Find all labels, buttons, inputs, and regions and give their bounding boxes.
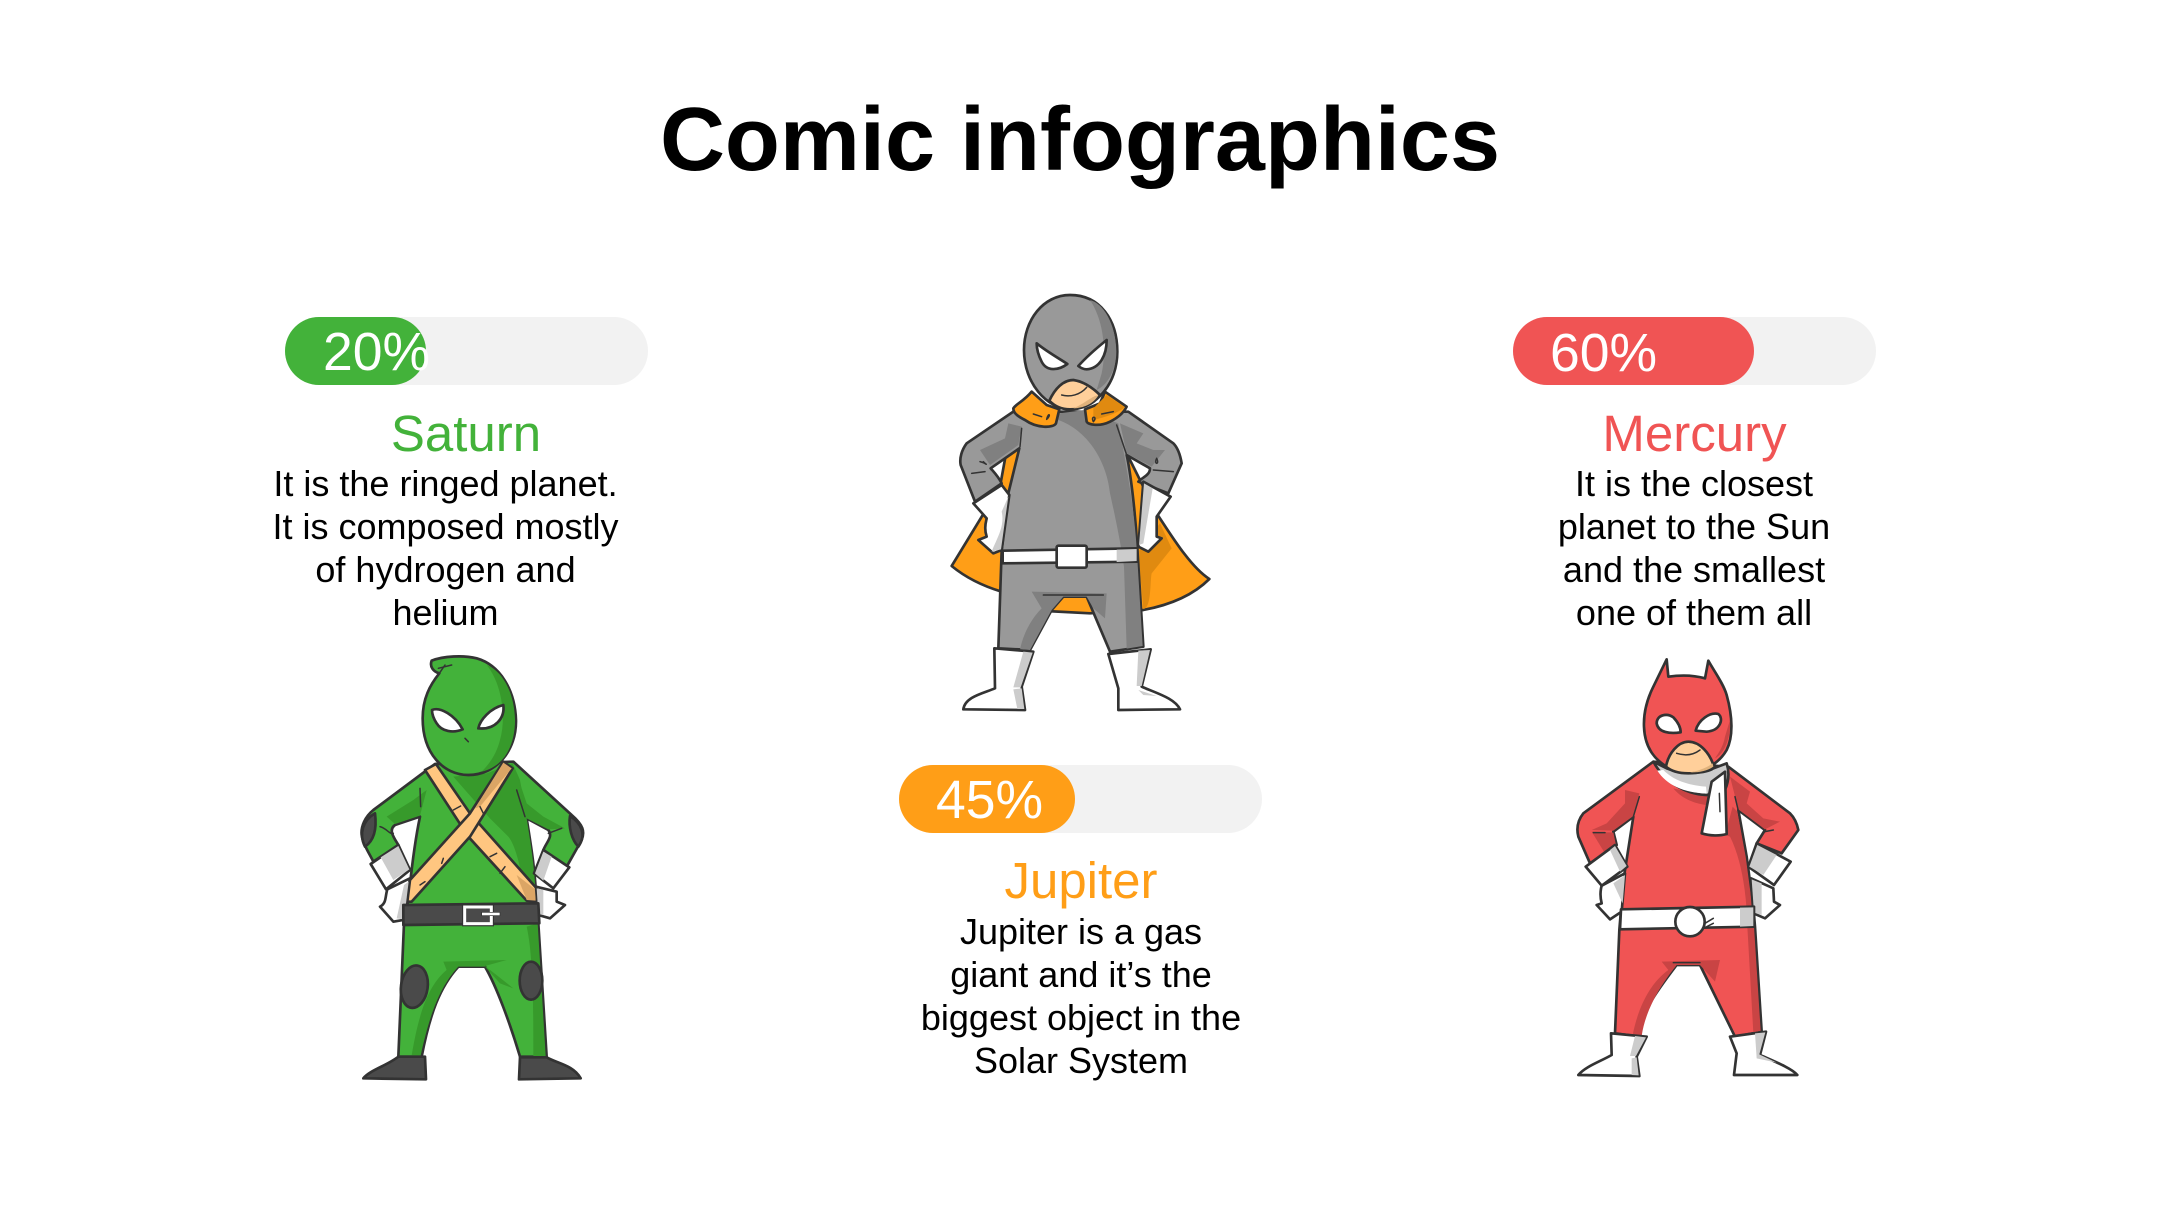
- description: Saturn: helium: [392, 592, 499, 633]
- head: [1024, 295, 1117, 409]
- progress bar: Saturn 20%: [285, 317, 648, 385]
- description: Jupiter: giant and it’s the: [950, 954, 1212, 995]
- description: Jupiter: Solar System: [974, 1040, 1188, 1081]
- knee pads: [398, 962, 542, 1010]
- description: Saturn: It is the ringed planet.: [273, 463, 618, 504]
- belt: [1003, 546, 1137, 568]
- head: [423, 656, 516, 775]
- description: Mercury: and the smallest: [1563, 549, 1825, 590]
- panel: Jupiter: [899, 295, 1262, 1081]
- gloves: [973, 482, 1171, 553]
- description: Mercury: planet to the Sun: [1558, 506, 1830, 547]
- icon: grey hero with cape: [952, 295, 1209, 710]
- boots: [363, 1057, 581, 1079]
- progress bar: Mercury 60%: 60%: [1550, 324, 1657, 383]
- body: [960, 412, 1182, 652]
- icon: red hero: [1577, 659, 1798, 1076]
- description: Jupiter: Jupiter is a gas: [960, 911, 1202, 952]
- belt: [1620, 907, 1754, 936]
- icon: green hero: [362, 656, 583, 1079]
- collar: [1013, 392, 1127, 427]
- title: Comic infographics: [660, 90, 1500, 190]
- scarf: [1653, 762, 1728, 835]
- elbow pads: [362, 813, 582, 847]
- heading: Saturn: Saturn: [391, 405, 541, 462]
- gloves: [371, 845, 569, 922]
- boots: [1578, 1032, 1797, 1076]
- description: Mercury: one of them all: [1576, 592, 1812, 633]
- heading: Mercury: Mercury: [1602, 405, 1787, 462]
- panel: Mercury: [1513, 317, 1876, 1076]
- progress bar: Jupiter 45%: [899, 765, 1262, 833]
- cape: [952, 413, 1209, 613]
- progress bar: Mercury 60%: [1513, 317, 1876, 385]
- belt: [403, 903, 539, 926]
- description: Mercury: It is the closest: [1575, 463, 1813, 504]
- panel: Saturn: [272, 317, 648, 1079]
- progress bar: Saturn 20%: 20%: [323, 323, 430, 382]
- heading: Jupiter: Jupiter: [1004, 852, 1158, 909]
- progress bar: Jupiter 45%: 45%: [936, 771, 1043, 830]
- gloves: [1586, 843, 1791, 919]
- boots: [963, 648, 1180, 710]
- body: [1577, 762, 1798, 1037]
- description: Saturn: It is composed mostly: [272, 506, 619, 547]
- description: Saturn: of hydrogen and: [315, 549, 576, 590]
- head: [1644, 659, 1731, 773]
- description: Jupiter: biggest object in the: [921, 997, 1241, 1038]
